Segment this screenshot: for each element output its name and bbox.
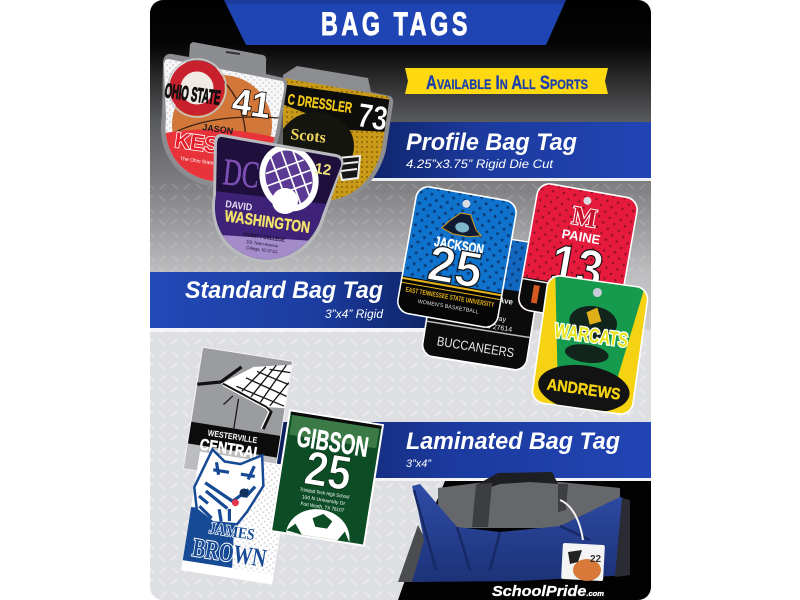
laminated tag: gibson [270, 409, 384, 547]
icon: husky mascot [193, 448, 265, 526]
profile tag: lacrosse washington: DAVID [225, 199, 253, 214]
bag strap [472, 483, 492, 527]
standard tag: warcats: WARCATS [553, 320, 629, 352]
tag cord [560, 500, 583, 540]
bag left side [398, 525, 428, 582]
hanging tag: 22 [590, 554, 602, 565]
standard tag: paine [518, 183, 638, 314]
profile tag: ohio state: OHIO STATE [163, 80, 222, 110]
ribbon: available in all sports: AVAILABLE IN ALL SPORTS [426, 73, 588, 94]
profile tag heading [406, 129, 577, 171]
profile tag heading: Profile Bag Tag [406, 129, 577, 156]
standard tag: warcats: ANDREWS [546, 376, 622, 404]
laminated tag size: 3”x4” [406, 458, 432, 470]
profile tag: ohio state: KESS [173, 127, 234, 160]
laminated tag: james brown [181, 448, 281, 584]
standard tag: buccaneers [422, 238, 536, 371]
profile tag: dressler: C DRESSLER [286, 91, 353, 117]
standard tag heading: Standard Bag Tag [185, 277, 383, 304]
laminated tag: gibson: Trinidad Tech High School [299, 487, 350, 501]
standard tag: buccaneers: ur [487, 306, 495, 314]
lower background [150, 330, 651, 600]
ribbon: available in all sports [405, 68, 608, 94]
bag interior [438, 480, 620, 528]
laminated tag: lacrosse: CENTRAL [199, 437, 263, 463]
laminated tag: lacrosse [183, 347, 293, 483]
black base behind bag [398, 481, 651, 600]
standard tag: buccaneers: BUCCANEERS [436, 333, 516, 360]
band: standard bag tag [150, 272, 450, 332]
upper background [150, 0, 651, 332]
laminated tag: james brown: 4 [278, 480, 285, 492]
profile tag: dressler [283, 66, 394, 202]
bag top handle [478, 472, 558, 488]
standard tag size: 3”x4” Rigid [325, 307, 383, 321]
standard tag: buccaneers: th Ave [489, 294, 514, 307]
profile tag: lacrosse washington: College, NJ 07111 [246, 245, 279, 255]
laminated tag heading: Laminated Bag Tag [406, 428, 620, 455]
icon: helmet facemask [337, 156, 360, 180]
profile tag size: 4.25”x3.75” Rigid Die Cut [406, 157, 554, 171]
profile tag: ohio state: JASON [202, 122, 234, 136]
laminated tag: lacrosse: WESTERVILLE [207, 428, 258, 445]
laminated tag: gibson: Fort Worth, TX 76107 [300, 501, 345, 514]
profile tag: ohio state [160, 42, 290, 195]
bag body [412, 484, 630, 582]
bag strap right [558, 484, 568, 512]
band: laminated bag tag [277, 422, 651, 481]
standard tag: jackson [395, 184, 519, 330]
standard tag heading [185, 277, 383, 321]
standard tag: buccaneers: chway [486, 314, 507, 324]
standard tag: jackson: WOMEN'S BASKETBALL [417, 299, 479, 316]
laminated tag: james brown: BROWN [191, 533, 268, 573]
hanging tag [561, 543, 605, 581]
laminated tag: gibson: GIBSON [295, 421, 371, 463]
icon: soccer ball [286, 509, 350, 542]
profile tag: lacrosse washington: DIVINITY COLLEGE [243, 232, 285, 244]
standard tag: jackson: 25 [424, 235, 487, 299]
standard tag: paine: 13 [546, 233, 608, 301]
profile tag: lacrosse washington: 12 [313, 160, 332, 179]
icon: pirate logo [441, 212, 482, 238]
laminated tag heading [406, 432, 620, 467]
profile tag: dressler: Scots [290, 126, 327, 147]
standard tag: paine: PAINE [561, 226, 602, 248]
bag fold shading [414, 490, 590, 570]
bag right panel [615, 498, 630, 577]
duffel bag photo [398, 472, 630, 582]
standard tag: jackson: JACKSON [433, 233, 485, 257]
title banner [224, 0, 566, 45]
laminated tag: james brown: JAMES [208, 520, 256, 544]
profile tag: lacrosse washington: 101 Team Avenue [246, 239, 279, 249]
standard tag: jackson: EAST TENNESSEE STATE UNIVERSITY [405, 287, 495, 309]
icon: warcats mascot [565, 306, 617, 363]
profile tag: ohio state: 41 [230, 80, 273, 126]
band: profile bag tag [340, 122, 651, 181]
profile tag: dressler: 73 [355, 96, 390, 139]
profile tag: lacrosse washington: WASHINGTON [223, 208, 311, 237]
laminated tag: gibson: 100 N University Dr [301, 494, 346, 507]
title text: BAG TAGS [321, 6, 471, 42]
standard tag: warcats [530, 273, 650, 419]
profile tag: ohio state: The Ohio State [180, 156, 214, 167]
profile tag: lacrosse washington [212, 134, 344, 260]
schoolpride logo: SchoolPride .com [492, 583, 604, 600]
profile tag: lacrosse washington: DC [221, 151, 261, 197]
infographic panel [150, 0, 651, 600]
standard tag: paine: M [570, 201, 599, 233]
icon: lacrosse stick [197, 364, 292, 430]
standard tag: buccaneers: 3 27614 [486, 323, 513, 334]
laminated tag: gibson: 25 [301, 442, 355, 501]
